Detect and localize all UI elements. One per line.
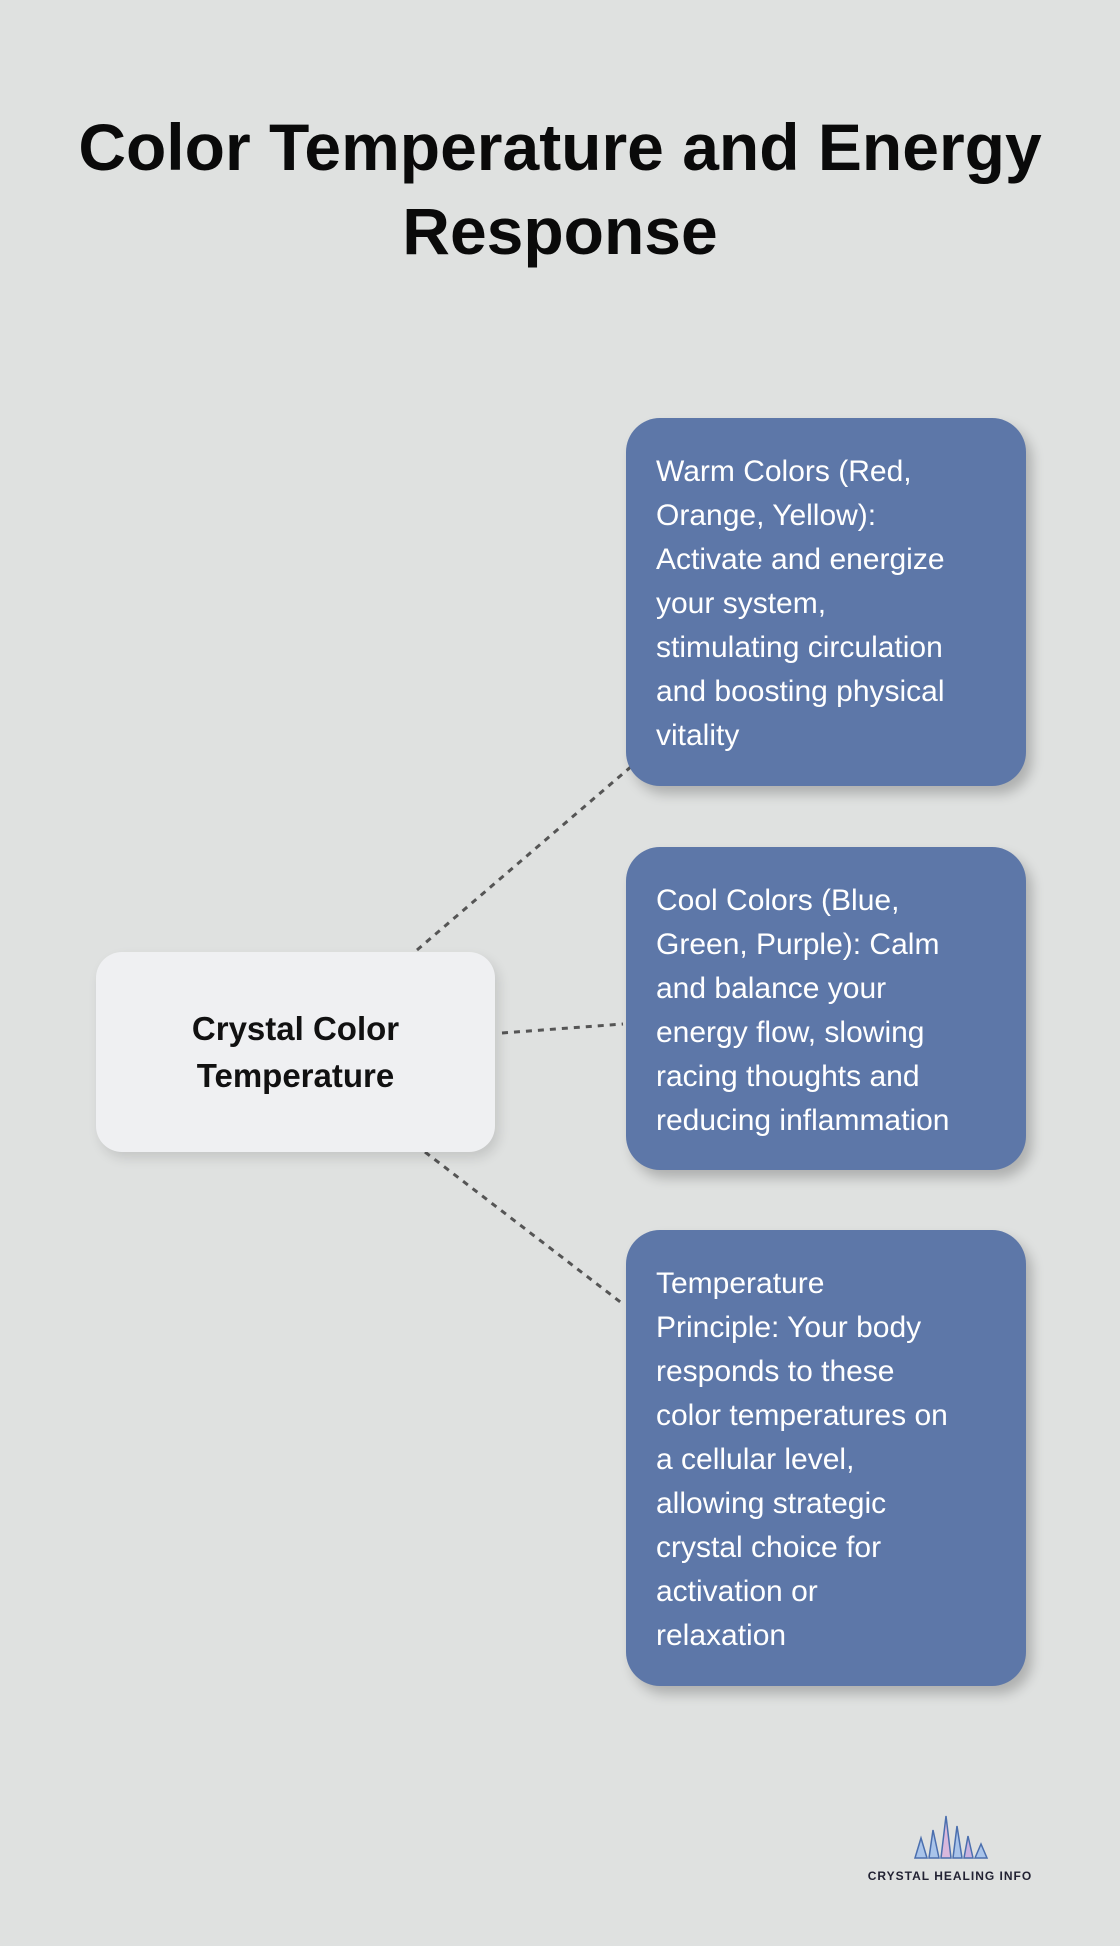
logo: CRYSTAL HEALING INFO — [868, 1869, 1032, 1883]
panel: temperature principle: color temperatures on — [656, 1399, 948, 1432]
panel: cool colors: racing thoughts and — [656, 1060, 920, 1093]
panel: temperature principle — [626, 1230, 1026, 1686]
panel: warm colors: and boosting physical — [656, 675, 945, 708]
panel: temperature principle: allowing strategic — [656, 1487, 886, 1520]
panel: cool colors: reducing inflammation — [656, 1104, 949, 1137]
panel: temperature principle: relaxation — [656, 1619, 786, 1652]
center node — [96, 952, 495, 1152]
panel: cool colors: and balance your — [656, 972, 886, 1005]
panel: warm colors: your system, — [656, 587, 826, 620]
panel: warm colors — [626, 418, 1026, 786]
panel: temperature principle: responds to these — [656, 1355, 894, 1388]
panel: temperature principle: Temperature — [656, 1267, 824, 1300]
center node: Crystal Color — [192, 1010, 399, 1047]
center node: Temperature — [197, 1057, 394, 1094]
panel: temperature principle: a cellular level, — [656, 1443, 854, 1476]
panel: cool colors: energy flow, slowing — [656, 1016, 924, 1049]
panel: cool colors — [626, 847, 1026, 1170]
logo — [868, 1816, 1032, 1883]
panel: temperature principle: activation or — [656, 1575, 818, 1608]
title: Response — [402, 194, 718, 268]
panel: warm colors: stimulating circulation — [656, 631, 943, 664]
panel: temperature principle: crystal choice for — [656, 1531, 881, 1564]
title: Color Temperature and Energy — [78, 110, 1042, 184]
title — [78, 110, 1042, 268]
panel: cool colors: Cool Colors (Blue, — [656, 884, 899, 917]
panel: temperature principle: Principle: Your body — [656, 1311, 921, 1344]
panel: warm colors: Warm Colors (Red, — [656, 455, 912, 488]
panel: cool colors: Green, Purple): Calm — [656, 928, 939, 961]
panel: warm colors: vitality — [656, 719, 739, 752]
panel: warm colors: Orange, Yellow): — [656, 499, 876, 532]
panel: warm colors: Activate and energize — [656, 543, 945, 576]
